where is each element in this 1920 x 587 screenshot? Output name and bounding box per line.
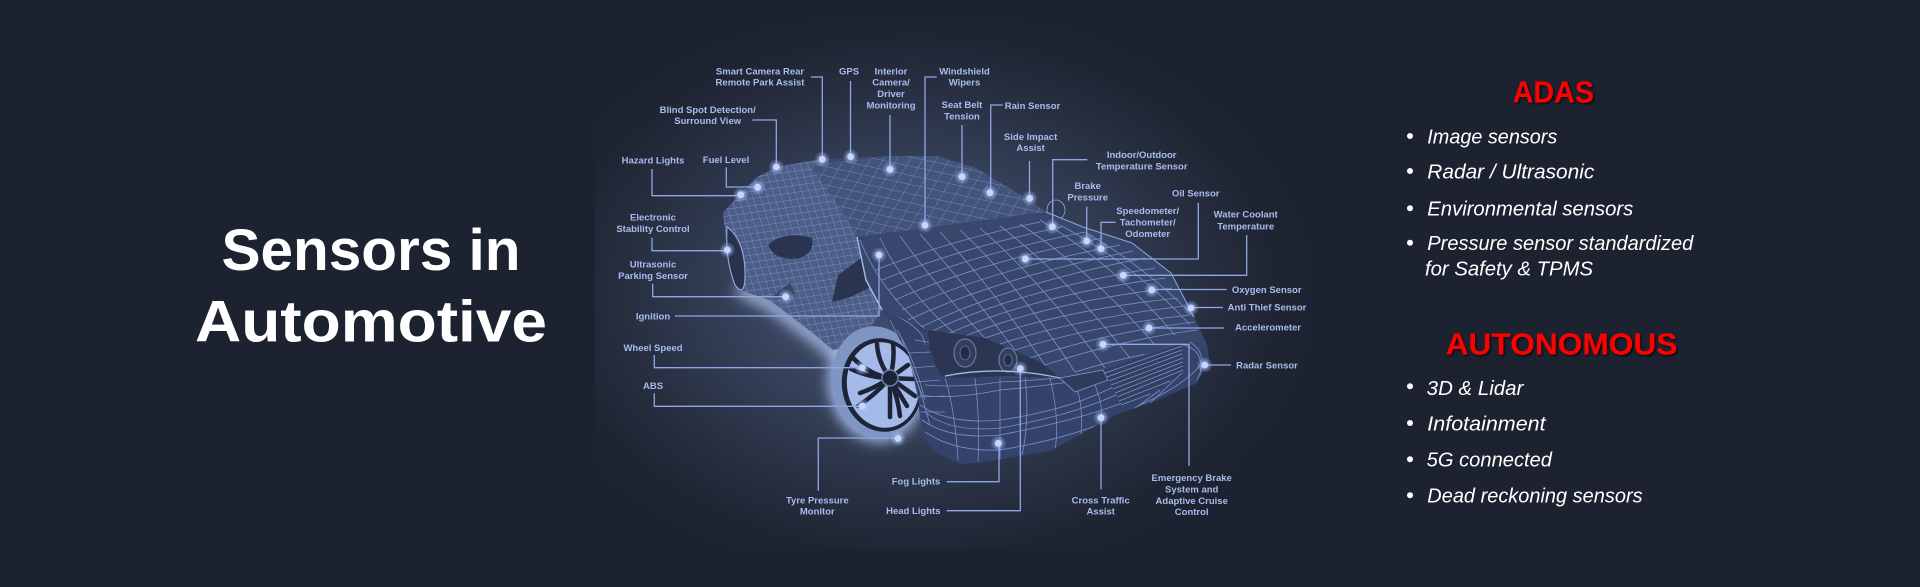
callout: Ultrasonic Parking Sensor: Ultrasonic <box>630 260 676 271</box>
heading: AUTONOMOUS: AUTONOMOUS <box>1446 326 1677 361</box>
callout: Interior Camera Driver Monitoring: Interior <box>875 66 908 77</box>
mirror <box>1047 200 1065 220</box>
callout: Interior Camera Driver Monitoring: Monitoring <box>866 101 916 112</box>
callout: Head Lights <box>886 361 1028 517</box>
roof and windshield <box>810 156 1046 239</box>
illustration: wireframe car <box>723 156 1209 464</box>
callout: Hazard Lights <box>622 156 749 203</box>
title: Automotive <box>195 290 547 354</box>
callout: Brake Pressure: Pressure <box>1067 193 1108 204</box>
callout: Speedometer Tachometer Odometer: Speedometer/ <box>1116 206 1179 217</box>
car silhouette base <box>723 156 1209 464</box>
title: Sensors in <box>222 218 520 283</box>
callout: Electronic Stability Control: Electronic <box>630 213 676 224</box>
callout: Oxygen Sensor: Oxygen Sensor <box>1232 285 1302 296</box>
callouts <box>616 66 1307 518</box>
callout: Windshield Wipers <box>917 66 990 233</box>
callout: Cross Traffic Assist: Assist <box>1086 507 1116 518</box>
callout: Side Impact Assist: Assist <box>1016 143 1046 154</box>
callout: Anti Thief Sensor <box>1183 300 1307 316</box>
callout: Smart Camera Rear Remote Park Assist: Smart Camera Rear <box>716 66 804 77</box>
callout: Seat Belt Tension <box>942 100 983 185</box>
callout: Electronic Stability Control: Stability Control <box>616 224 690 235</box>
callout: Smart Camera Rear Remote Park Assist <box>716 66 830 167</box>
hood <box>857 212 1207 378</box>
callout: Fog Lights: Fog Lights <box>892 476 940 487</box>
callout: Seat Belt Tension: Tension <box>944 112 980 123</box>
callout: Speedometer Tachometer Odometer: Tachometer/ <box>1120 218 1176 229</box>
callout: Speedometer Tachometer Odometer: Odometer <box>1125 229 1170 240</box>
callout: Smart Camera Rear Remote Park Assist: Remote Park Assist <box>716 78 805 89</box>
list: AUTONOMOUS items <box>1407 378 1643 507</box>
title <box>195 218 547 354</box>
callout: Rain Sensor <box>982 101 1061 201</box>
callout: Water Coolant Temperature: Water Coolant <box>1214 210 1279 221</box>
callout: Blind Spot Detection Surround View: Blind Spot Detection/ <box>660 105 756 116</box>
list: ADAS items: Radar / Ultrasonic <box>1427 162 1594 184</box>
list: ADAS items: Image sensors <box>1427 126 1557 148</box>
callout: Rain Sensor: Rain Sensor <box>1005 101 1061 112</box>
callout: Radar Sensor <box>1197 357 1298 373</box>
callout: Cross Traffic Assist: Cross Traffic <box>1072 496 1130 507</box>
callout: Ultrasonic Parking Sensor: Parking Sensor <box>618 271 688 282</box>
callout: ABS <box>643 381 870 414</box>
callout: Accelerometer <box>1141 320 1301 336</box>
list: ADAS items: for Safety & TPMS <box>1425 259 1594 281</box>
callout: Fuel Level <box>703 155 766 195</box>
callout: Fog Lights <box>892 435 1006 487</box>
panel: car sensor diagram backdrop <box>595 20 1335 550</box>
list: AUTONOMOUS items: 5G connected <box>1427 450 1553 472</box>
callout: Side Impact Assist: Side Impact <box>1004 132 1058 143</box>
callout: Brake Pressure <box>1067 181 1108 249</box>
callout: Blind Spot Detection Surround View <box>660 105 784 175</box>
callout: Emergency Brake System and Adaptive Cruise Control: Emergency Brake <box>1152 473 1232 484</box>
front wheel <box>823 319 931 445</box>
list: ADAS items: Pressure sensor standardized <box>1427 233 1694 255</box>
list: ADAS items: Environmental sensors <box>1427 198 1633 220</box>
callout: Tyre Pressure Monitor: Monitor <box>800 507 835 518</box>
callout: Water Coolant Temperature <box>1115 210 1279 283</box>
callout: Fuel Level: Fuel Level <box>703 155 749 166</box>
callout: Windshield Wipers: Windshield <box>939 66 990 77</box>
headlight housing <box>928 330 1060 378</box>
callout: Interior Camera Driver Monitoring: Camera/ <box>872 78 910 89</box>
callout: Seat Belt Tension: Seat Belt <box>942 100 983 111</box>
callout: ABS: ABS <box>643 381 663 392</box>
callout: Indoor/Outdoor Temperature Sensor <box>1044 150 1188 235</box>
callout: Windshield Wipers: Wipers <box>949 78 980 89</box>
callout: Electronic Stability Control <box>616 213 735 258</box>
callout: Blind Spot Detection Surround View: Surround View <box>674 116 742 127</box>
callout: Accelerometer: Accelerometer <box>1235 323 1301 334</box>
callout: Head Lights: Head Lights <box>886 506 940 517</box>
callout: Radar Sensor: Radar Sensor <box>1236 361 1298 372</box>
callout: Emergency Brake System and Adaptive Cruise Control: Control <box>1175 507 1209 518</box>
callout: Side Impact Assist <box>1004 132 1058 206</box>
callout: Ultrasonic Parking Sensor <box>618 260 794 305</box>
heading: ADAS: ADAS <box>1513 75 1594 110</box>
callout: Cross Traffic Assist <box>1072 410 1130 518</box>
callout: Hazard Lights: Hazard Lights <box>622 156 684 167</box>
callout: Oxygen Sensor <box>1144 282 1302 298</box>
callout: Tyre Pressure Monitor: Tyre Pressure <box>786 496 849 507</box>
list: AUTONOMOUS items: Infotainment <box>1427 414 1547 436</box>
list: ADAS items <box>1407 126 1694 281</box>
callout: Emergency Brake System and Adaptive Cruise Control: Adaptive Cruise <box>1156 496 1228 507</box>
callout: Brake Pressure: Brake <box>1074 181 1101 192</box>
callout: Emergency Brake System and Adaptive Cruise Control <box>1095 336 1232 518</box>
callout: Interior Camera Driver Monitoring <box>866 66 916 177</box>
callout: Anti Thief Sensor: Anti Thief Sensor <box>1228 302 1307 313</box>
callout: Indoor/Outdoor Temperature Sensor: Temperature Sensor <box>1096 162 1188 173</box>
callout: Interior Camera Driver Monitoring: Driver <box>877 89 905 100</box>
callout: GPS: GPS <box>839 66 859 77</box>
list: AUTONOMOUS items: 3D & Lidar <box>1427 378 1525 400</box>
list: AUTONOMOUS items: Dead reckoning sensors <box>1427 485 1643 507</box>
front bumper and fender <box>882 310 1209 464</box>
callout: Wheel Speed <box>623 343 870 376</box>
callout: Oil Sensor: Oil Sensor <box>1172 189 1220 200</box>
callout: Speedometer Tachometer Odometer <box>1093 206 1179 257</box>
callout: Indoor/Outdoor Temperature Sensor: Indoor/Outdoor <box>1107 150 1177 161</box>
callout: Oil Sensor <box>1017 189 1220 267</box>
callout: Ignition <box>636 247 887 323</box>
glow under car side <box>738 288 932 449</box>
callout: Tyre Pressure Monitor <box>786 430 906 518</box>
rear and side body <box>723 159 882 350</box>
callout: Ignition: Ignition <box>636 312 670 323</box>
grille <box>1060 343 1183 407</box>
callout: Emergency Brake System and Adaptive Cruise Control: System and <box>1165 485 1219 496</box>
callout: Wheel Speed: Wheel Speed <box>623 343 683 354</box>
callout: Water Coolant Temperature: Temperature <box>1217 221 1274 232</box>
callout: GPS <box>839 66 859 165</box>
